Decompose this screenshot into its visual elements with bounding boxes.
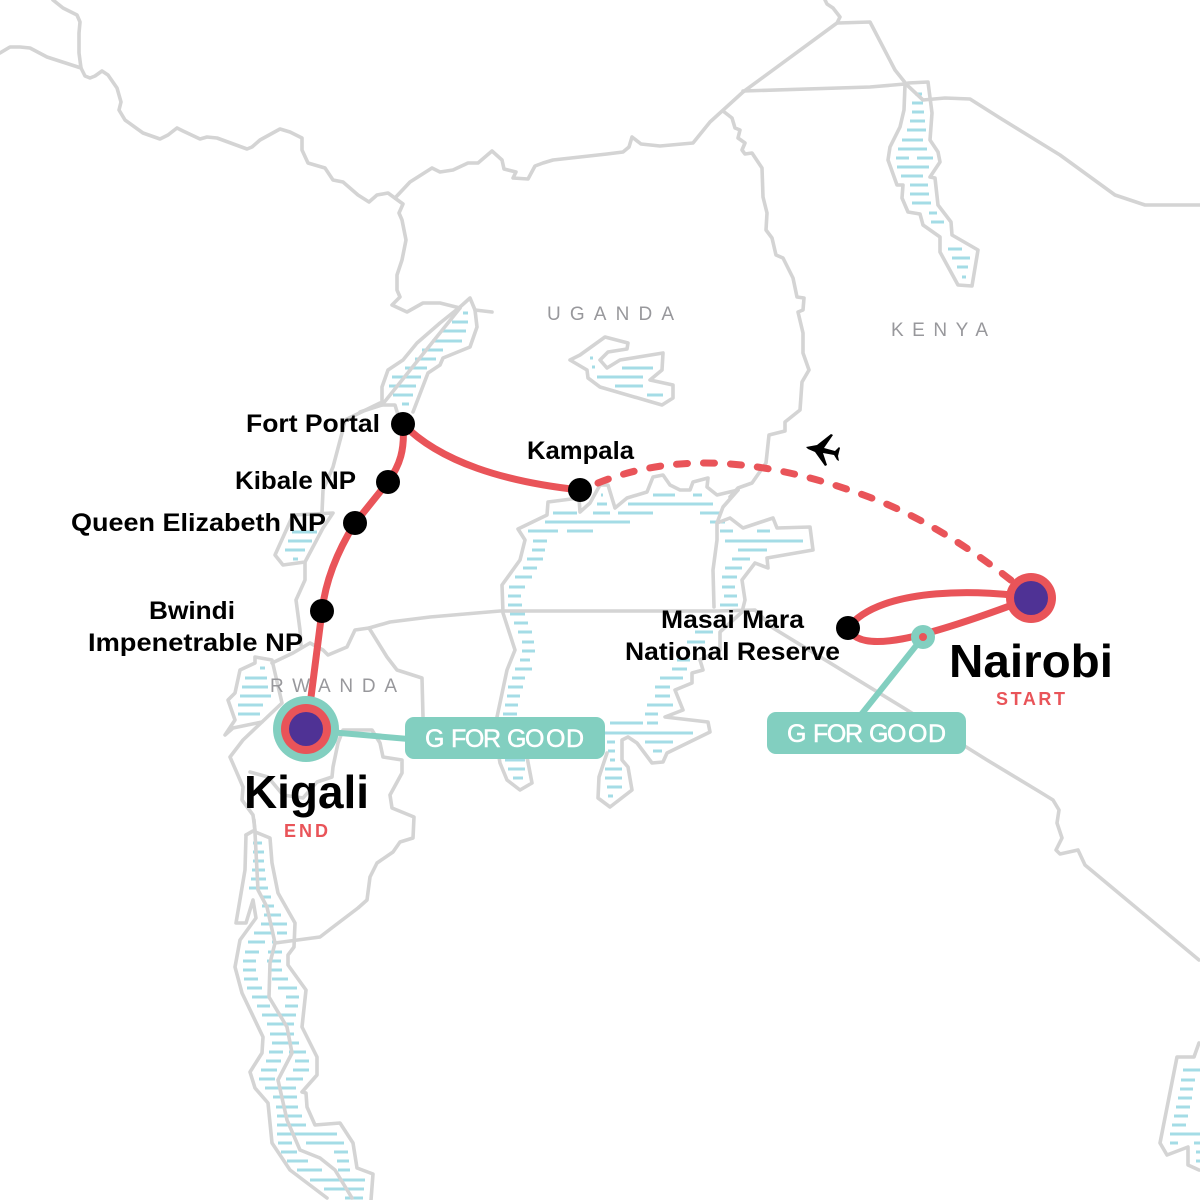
icon: plane [806,434,840,466]
label: Kenya: KENYA [891,320,988,341]
pill: G for Good Masai Mara: D [928,720,946,748]
lake outline: Victoria [497,475,738,790]
label: Kibale NP: Kibale NP [235,467,356,495]
pill: G for Good Kigali: D [566,725,584,753]
lake hatching: Kivu [238,668,271,714]
label: Masai Mara National Reserve [625,606,840,666]
label: Nairobi start [949,635,1113,709]
G for Good connector: Kigali [306,730,420,740]
label: Uganda: UGANDA [547,304,674,325]
lake outline: Edward [275,513,333,565]
marker: Masai Mara [836,616,860,640]
pill: G for Good Masai Mara: FOR [813,720,863,748]
place labels [71,410,1113,841]
pill: G for Good Masai Mara: O [887,720,906,748]
pill: G for Good Kigali: O [546,725,565,753]
route: Fort Portal to Kampala [403,424,580,490]
lake hatching: Victoria [503,495,803,796]
water hatching: lakes [238,94,1200,1198]
lake outline: Turkana [888,82,978,286]
label: Kigali end: END [284,821,328,841]
label: Kigali end [244,766,369,841]
G for Good connector: Masai Mara [860,637,923,716]
pill: G for Good Masai Mara [767,712,966,754]
pill: G for Good Masai Mara: O [908,720,927,748]
marker: Kampala [568,478,592,502]
label: Nairobi start: START [996,689,1065,709]
lake hatching: Edward [285,532,317,559]
country labels [270,304,988,697]
pill: G for Good Kigali: O [525,725,544,753]
lake hatching: Kyoga [590,358,663,395]
route: Fort Portal to Kigali [310,424,403,705]
border: north Uganda [395,0,840,198]
border: Uganda Congo south [322,403,380,513]
label: Bwindi Impenetrable NP: Bwindi [149,597,235,625]
pill: G for Good Kigali: G [425,725,444,753]
marker: Nairobi start [1006,573,1056,623]
flight route: Kampala to Nairobi [598,463,1012,581]
label: Kampala: Kampala [527,437,635,465]
lake outline: Tanganyika [246,831,373,1200]
lake hatching: Albert [389,313,468,404]
lake outline: Kivu [225,657,282,735]
label: Fort Portal: Fort Portal [246,410,380,438]
marker: Bwindi [310,599,334,623]
overland route [310,424,1031,705]
lake outline: Albert [413,310,492,412]
marker: Kibale NP [376,470,400,494]
lake hatching: Tanganyika [243,843,365,1198]
route: Nairobi to Masai Mara loop [848,593,1031,642]
border: Uganda Kenya [723,111,809,497]
border: north-west [53,0,81,68]
border: north Kenya [743,84,905,91]
pill: G for Good Kigali [405,717,605,759]
lake hatching: Turkana [896,94,970,277]
label: Bwindi Impenetrable NP: Impenetrable NP [88,629,303,657]
marker: Queen Elizabeth NP [343,511,367,535]
pill: G for Good Kigali: G [507,725,526,753]
border and lake outline: south-east [1160,1043,1199,1170]
pill: G for Good Masai Mara: G [787,720,806,748]
marker: Fort Portal [391,412,415,436]
pill: G for Good Kigali: FOR [451,725,501,753]
label: Nairobi start: Nairobi [949,635,1113,687]
border: Rwanda and Burundi [369,628,423,717]
label: Masai Mara National Reserve: National Reserve [625,638,840,666]
label: Masai Mara National Reserve: Masai Mara [661,606,805,634]
label: Queen Elizabeth NP: Queen Elizabeth NP [71,509,326,537]
label: Bwindi Impenetrable NP [88,597,303,657]
pill: G for Good Masai Mara: G [869,720,888,748]
stop markers [310,412,860,640]
lake hatching: Malawi [1170,1070,1200,1161]
label: Rwanda: RWANDA [270,676,397,697]
marker: G for Good stop [911,625,935,649]
label: Kigali end: Kigali [244,766,369,818]
marker: Kigali end [273,696,339,762]
lake outline: Kyoga [570,337,673,405]
